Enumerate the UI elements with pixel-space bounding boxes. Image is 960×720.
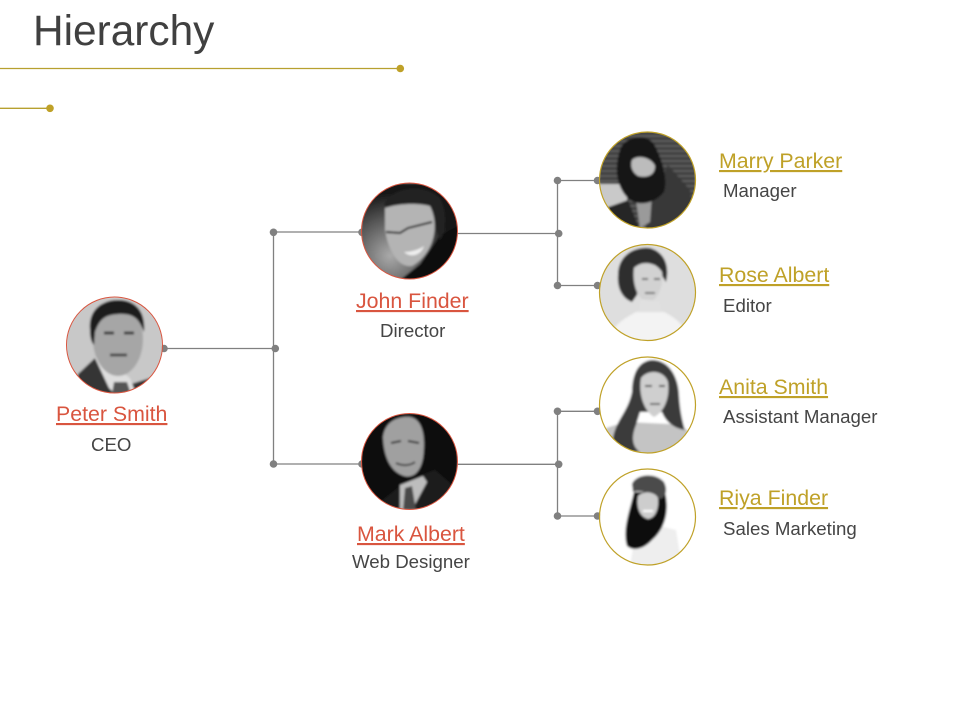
node: John Finder (356, 183, 469, 341)
role: Assistant Manager: Assistant Manager (723, 406, 878, 427)
node: Riya Finder (599, 469, 857, 566)
name: John Finder: John Finder (356, 289, 469, 313)
name: Mark Albert: Mark Albert (357, 522, 465, 546)
name: Anita Smith: Anita Smith (719, 375, 828, 399)
node: Anita Smith (599, 357, 878, 454)
portrait: Mark Albert (361, 413, 458, 510)
name: Riya Finder: Riya Finder (719, 486, 828, 510)
role: Web Designer: Web Designer (352, 551, 470, 572)
node: Rose Albert (599, 244, 829, 341)
node: Marry Parker (599, 131, 842, 230)
role: Sales Marketing: Sales Marketing (723, 518, 857, 539)
role: Director: Director (380, 320, 445, 341)
name: Peter Smith: Peter Smith (56, 402, 167, 426)
portrait: Riya Finder (599, 469, 696, 566)
role: CEO: CEO (91, 434, 131, 455)
portrait: John Finder (361, 183, 460, 280)
portrait: Marry Parker (599, 131, 696, 230)
name: Marry Parker: Marry Parker (719, 149, 842, 173)
node: Peter Smith (56, 297, 167, 455)
title: Hierarchy (33, 7, 215, 54)
portrait: Rose Albert (599, 244, 696, 341)
portrait: Peter Smith (66, 297, 163, 394)
connector: Mark Albert to reports (457, 408, 601, 520)
node: Mark Albert (352, 413, 470, 572)
portrait: Anita Smith (599, 357, 696, 454)
connector: CEO to directors (160, 228, 366, 468)
name: Rose Albert: Rose Albert (719, 263, 829, 287)
decorative gold line long with dot (0, 65, 404, 72)
decorative gold line short with dot (0, 104, 54, 112)
role: Editor: Editor (723, 295, 772, 316)
connector: John Finder to reports (457, 177, 601, 289)
role: Manager: Manager (723, 180, 797, 201)
